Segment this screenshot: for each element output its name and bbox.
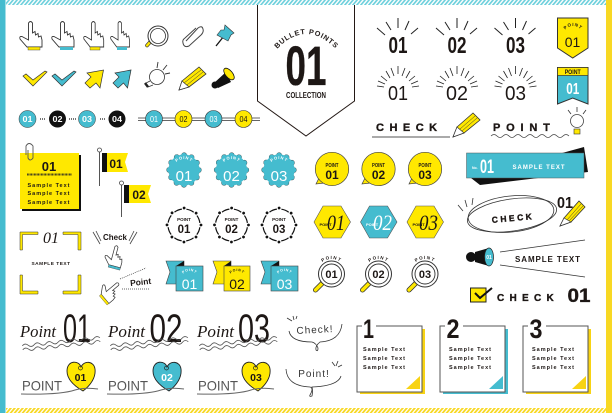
card 2: Sample Text [449, 356, 492, 362]
teal title bar with black shadow: No. [472, 166, 478, 170]
teal ribbon badge [558, 68, 588, 104]
magnifier badge 01: POINT [321, 256, 342, 262]
hand-drawn oval CHECK with pencil [458, 192, 585, 237]
teal ribbon badge: POINT [565, 70, 581, 76]
dotted circle badge 02: POINT [225, 217, 239, 222]
heart POINT 02: 02 [161, 372, 173, 384]
teal title bar with black shadow [466, 147, 588, 185]
steps: numbered circles 01 to 04: 02 [52, 115, 63, 124]
sunburst number 01 bold: 01 [388, 32, 408, 58]
dotted circle badge 01: 01 [178, 224, 191, 236]
speech bubble 01: POINT [326, 163, 339, 169]
teal ribbon badge: 01 [566, 81, 579, 98]
heading Point 03 [196, 307, 277, 351]
yellow pennant badge [557, 18, 588, 59]
frame: yellow right bar [606, 0, 612, 413]
hand-drawn Point! bubble: Point! [298, 369, 330, 380]
title banner: Bullet Points 01 Collection: 01 [286, 34, 326, 97]
card 3 [523, 314, 591, 394]
megaphone SAMPLE TEXT: SAMPLE TEXT [515, 255, 581, 264]
hexagon badge 02: POINT [366, 222, 379, 227]
speech bubble 01 [315, 152, 349, 186]
folded flag badge 01: POINT [182, 268, 197, 274]
steps: numbered circles 01 to 04: 01 [22, 115, 33, 124]
magnifier badge 01 [313, 256, 345, 292]
hexagon badge 01: 01 [327, 210, 345, 235]
heart POINT 03 [197, 362, 274, 394]
heading Point 01: 01 [63, 307, 91, 351]
label: POINT with bulb [491, 107, 586, 138]
heading Point 03: Point [196, 322, 235, 341]
hexagon badge 02 [360, 206, 397, 238]
heart POINT 03: POINT [198, 378, 238, 394]
icon: light bulb [145, 62, 170, 87]
steps: numbered circles 01 to 04 [19, 110, 126, 128]
icon group: pointing hands [20, 22, 130, 50]
icon: yellow check [23, 71, 47, 86]
Check callout with hand: Check [103, 232, 127, 242]
sunburst number 02 bold [436, 18, 477, 58]
sunburst number 03 thin: 03 [505, 83, 526, 105]
sunburst number 03 thin [494, 66, 536, 105]
card 1: 1 [363, 314, 374, 344]
steps: circles on a double line: 03 [210, 115, 218, 124]
frame: teal left bar [0, 0, 6, 413]
heading Point 01: Point [19, 322, 57, 341]
dotted circle badge 03: POINT [272, 217, 286, 222]
hexagon badge 03: POINT [412, 222, 425, 227]
magnifier badge 02 [360, 256, 392, 292]
dotted circle badge 02: 02 [225, 224, 238, 236]
card 1 [357, 314, 425, 394]
frame: corner brackets with 01: SAMPLE TEXT [31, 261, 71, 267]
sticky note with clip: Sample Text [28, 200, 70, 206]
folded flag badge 01 [166, 260, 204, 292]
frame: teal hatched top strip [6, 0, 606, 5]
magnifier badge 03: 03 [419, 269, 431, 281]
heading Point 01 [19, 307, 100, 351]
teal scalloped badge 03: 03 [271, 168, 287, 185]
teal scalloped badge 02 [214, 152, 250, 188]
heart POINT 02 [107, 362, 184, 394]
checkbox CHECK 01: 01 [568, 286, 591, 307]
hexagon badge 03: 03 [419, 210, 438, 235]
card 1: Sample Text [363, 356, 406, 362]
magnifier badge 01: 01 [325, 269, 338, 281]
magnifier badge 02: 02 [372, 269, 385, 281]
teal scalloped badge 03: POINT [270, 156, 288, 162]
title banner: Bullet Points 01 Collection: COLLECTION [286, 90, 326, 100]
Check callout with hand [93, 231, 137, 270]
frame: corner brackets with 01: 01 [43, 230, 59, 247]
speech bubble 03: POINT [418, 163, 432, 169]
hexagon badge 03 [407, 206, 444, 238]
teal title bar with black shadow: 01 [480, 157, 494, 178]
card 2: Sample Text [449, 347, 492, 353]
speech bubble 02: POINT [372, 163, 385, 169]
icon: paper clip [183, 27, 203, 47]
sunburst number 01 thin [377, 66, 419, 105]
icon: push pin [216, 25, 234, 46]
title banner: Bullet Points 01 Collection [257, 5, 355, 137]
hand-drawn oval CHECK with pencil: CHECK [491, 211, 535, 225]
magnifier badge 03 [406, 256, 438, 292]
sunburst number 03 bold: 03 [506, 32, 525, 58]
dotted circle badge 02 [214, 208, 248, 242]
card 3: Sample Text [532, 365, 575, 371]
steps: numbered circles 01 to 04: 04 [112, 115, 123, 124]
steps: circles on a double line: 01 [150, 115, 158, 124]
card 3: Sample Text [532, 347, 575, 353]
megaphone SAMPLE TEXT: 01 [486, 255, 492, 261]
sunburst number 02 thin: 02 [446, 83, 468, 105]
teal scalloped badge 01: 01 [176, 168, 192, 185]
icon: yellow arrow [85, 70, 104, 88]
speech bubble 01: 01 [325, 168, 339, 182]
checkbox CHECK 01: CHECK [497, 293, 559, 304]
sticky note with clip: Sample Text [28, 183, 70, 189]
folded flag badge 03 [260, 260, 298, 292]
sunburst number 01 bold [377, 18, 418, 58]
card 1: Sample Text [363, 365, 406, 371]
heart POINT 01: 01 [75, 372, 86, 384]
speech bubble 03: 03 [418, 168, 432, 182]
sticky note with clip: Sample Text [28, 191, 70, 197]
teal scalloped badge 03 [261, 152, 297, 188]
teal scalloped badge 02: POINT [222, 156, 240, 162]
icon: megaphone [212, 66, 236, 88]
sticky note with clip [20, 144, 81, 211]
hexagon badge 01 [314, 206, 350, 238]
dotted circle badge 03: 03 [273, 224, 285, 236]
magnifier badge 02: POINT [368, 256, 388, 262]
heading Point 02: Point [107, 322, 146, 341]
Point callout with hand: Point [130, 276, 152, 288]
steps: circles on a double line: 04 [240, 115, 248, 124]
label: POINT with bulb: POINT [493, 122, 556, 134]
heading Point 02 [107, 307, 188, 351]
yellow pennant badge: 01 [565, 34, 580, 50]
megaphone SAMPLE TEXT [466, 240, 585, 277]
card 1: Sample Text [363, 347, 406, 353]
heart POINT 02: POINT [108, 378, 148, 394]
magnifier badge 03: POINT [414, 256, 435, 262]
dotted circle badge 01 [167, 208, 201, 242]
icon: magnifier [147, 26, 168, 46]
steps: circles on a double line [138, 110, 260, 128]
speech bubble 03 [408, 152, 442, 186]
teal title bar with black shadow: SAMPLE TEXT [512, 165, 566, 171]
label: CHECK with pencil [372, 113, 480, 137]
card 3: Sample Text [532, 356, 575, 362]
folded flag badge 02 [212, 260, 250, 292]
folded flag badge 02: 02 [229, 276, 245, 292]
hexagon badge 01: POINT [320, 222, 332, 227]
teal scalloped badge 01 [166, 152, 202, 188]
label: CHECK with pencil: CHECK [376, 122, 443, 134]
hand-drawn Check! bubble: Check! [296, 324, 334, 337]
frame: corner brackets with 01 [20, 230, 81, 294]
folded flag badge 01: 01 [182, 276, 197, 292]
icon: pencil [179, 67, 206, 90]
teal scalloped badge 01: POINT [175, 156, 192, 162]
hand-drawn oval CHECK with pencil: 01 [557, 195, 573, 212]
folded flag badge 03: 03 [277, 276, 292, 292]
heart POINT 03: 03 [250, 372, 262, 384]
flag 01: 01 [109, 157, 123, 171]
dotted circle badge 01: POINT [177, 217, 191, 222]
sunburst number 01 thin: 01 [388, 83, 408, 105]
card 2 [440, 314, 508, 394]
title banner: Bullet Points 01 Collection: BULLET POINTS [274, 29, 338, 48]
steps: numbered circles 01 to 04: 03 [82, 115, 93, 124]
heart POINT 01 [21, 362, 98, 394]
hand-drawn Point! bubble [286, 361, 342, 396]
icon: teal check [52, 71, 76, 86]
frame: yellow hatched bottom strip [6, 408, 606, 413]
icon: teal arrow [113, 70, 131, 88]
flag 02 [120, 181, 151, 217]
speech bubble 02: 02 [372, 168, 385, 182]
folded flag badge 02: POINT [229, 268, 244, 274]
dotted circle badge 03 [262, 208, 296, 242]
heading Point 03: 03 [238, 307, 270, 351]
sunburst number 02 bold: 02 [448, 32, 466, 58]
heart POINT 01: POINT [22, 378, 62, 394]
card 2: Sample Text [449, 365, 492, 371]
sticky note with clip: 01 [42, 159, 56, 174]
card 3: 3 [530, 314, 542, 344]
sunburst number 02 thin [436, 66, 478, 105]
teal scalloped badge 02: 02 [223, 168, 240, 185]
Point callout with hand [96, 268, 152, 305]
flag 02: 02 [132, 188, 146, 202]
speech bubble 02 [362, 152, 395, 186]
folded flag badge 03: POINT [276, 268, 292, 274]
sunburst number 03 bold [494, 18, 536, 58]
steps: circles on a double line: 02 [180, 115, 188, 124]
heading Point 02: 02 [150, 307, 182, 351]
flag 01 [98, 148, 128, 186]
checkbox CHECK 01 [470, 286, 591, 307]
yellow pennant badge: POINT [563, 22, 582, 30]
hexagon badge 02: 02 [373, 210, 392, 235]
hand-drawn Check! bubble [287, 316, 342, 351]
card 2: 2 [446, 314, 460, 344]
